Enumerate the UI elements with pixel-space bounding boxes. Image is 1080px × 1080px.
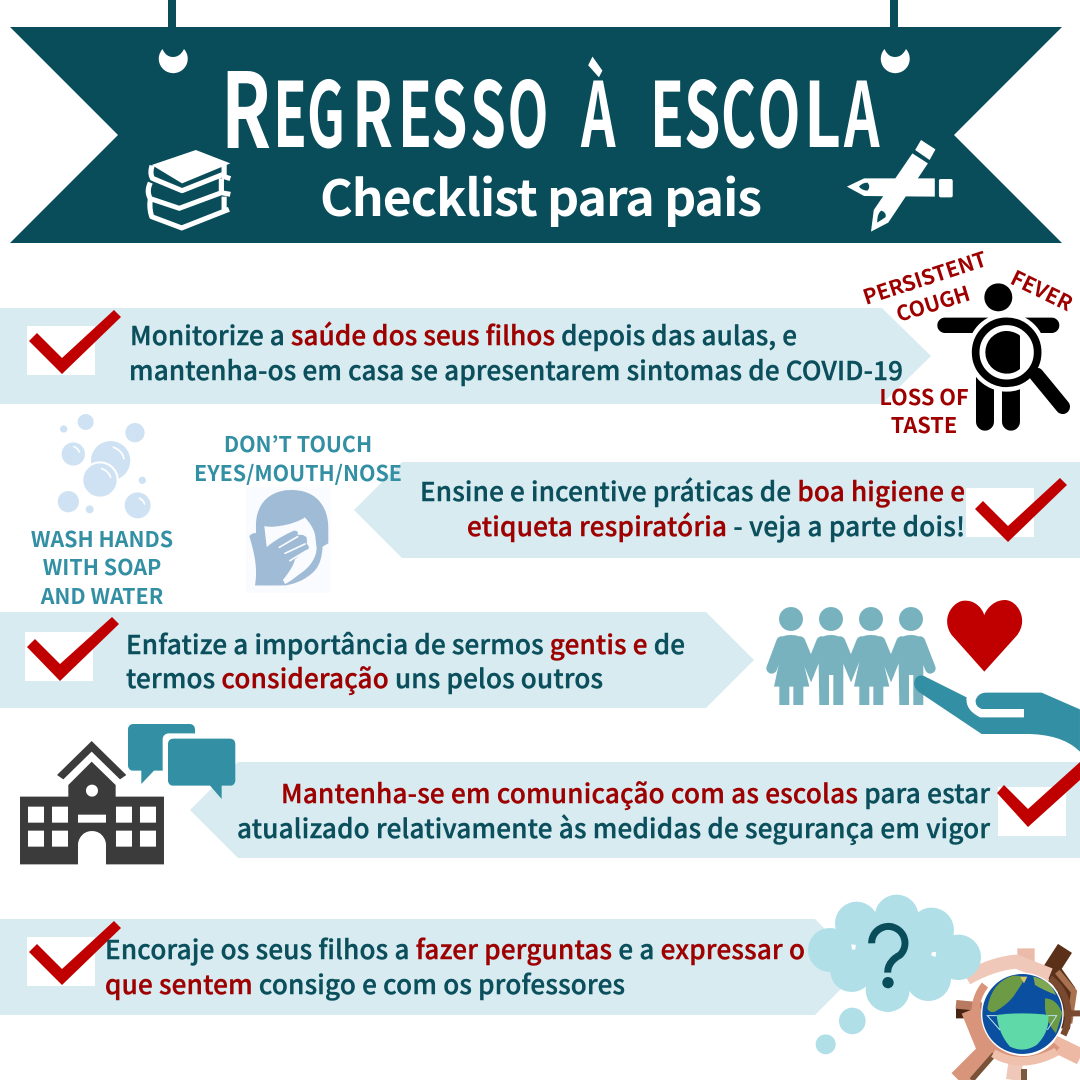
- label: wash hands: AND WATER: [40, 580, 164, 611]
- row 4: text: atualizado relativamente às medidas de segurança em vigor: [237, 809, 990, 846]
- row 1: text: mantenha-os em casa se apresentarem sintomas de COVID-19: [129, 351, 903, 388]
- row 1: text: [129, 316, 903, 388]
- row 3: text: Enfatize a importância de sermos gentis e de: [126, 625, 685, 662]
- row 4: text: Mantenha-se em comunicação com as escolas para estar: [281, 774, 990, 811]
- title: E: [398, 43, 432, 173]
- label: persistent cough: PERSISTENT: [859, 243, 990, 312]
- title: L: [804, 43, 841, 173]
- icon: four children: [772, 607, 930, 705]
- title: O: [508, 43, 548, 173]
- label: do not touch: EYES/MOUTH/NOSE: [194, 457, 402, 488]
- icon: speech bubbles: [128, 724, 235, 799]
- title: C: [721, 43, 756, 173]
- row 5: check: [27, 921, 121, 986]
- title: S: [470, 43, 506, 173]
- hanging banner: [10, 0, 1062, 243]
- label: do not touch: DON’T TOUCH: [224, 428, 372, 459]
- title: E: [650, 43, 684, 173]
- row 4: school communication band: [190, 762, 1080, 858]
- row 5: text: [105, 930, 805, 1002]
- title: S: [684, 43, 720, 173]
- row 3: text: [126, 625, 685, 696]
- row 4: check: [997, 762, 1080, 836]
- label: fever: FEVER: [1006, 262, 1078, 318]
- row 2: hygiene band: [354, 462, 1080, 558]
- title: E: [273, 43, 307, 173]
- row 3: check: [25, 617, 119, 681]
- row 2: text: Ensine e incentive práticas de boa higiene e: [420, 472, 965, 509]
- row 2: check: [966, 478, 1067, 542]
- icon: soap bubbles: [58, 414, 151, 518]
- icon: heart: [947, 600, 1022, 672]
- icon: person under magnifier: [945, 283, 1063, 431]
- label: wash hands: [31, 523, 173, 611]
- row 5: text: Encoraje os seus filhos a fazer perguntas e a expressar o: [105, 930, 805, 967]
- label: persistent cough: COUGH: [892, 278, 974, 329]
- row 3: kindness band: [0, 612, 754, 708]
- icon: face covering with hand: [246, 487, 331, 593]
- icon: thought cloud with question mark: [808, 895, 981, 1054]
- title: À: [580, 43, 616, 173]
- row 5: text: que sentem consigo e com os professores: [105, 965, 625, 1002]
- title: S: [431, 43, 468, 173]
- row 4: text: [237, 774, 990, 846]
- title: R: [221, 27, 271, 178]
- title: A: [843, 43, 880, 173]
- label: loss of taste: TASTE: [891, 409, 957, 440]
- row 2: text: etiqueta respiratória - veja a parte dois!: [467, 507, 965, 544]
- row 3: text: termos consideração uns pelos outros: [126, 659, 603, 696]
- icon: open hand: [914, 676, 1080, 752]
- row 2: text: [420, 472, 965, 544]
- icon: books: [148, 150, 230, 228]
- label: do not touch: [194, 428, 402, 488]
- label: loss of taste: [879, 381, 969, 440]
- label: wash hands: WITH SOAP: [43, 551, 161, 582]
- subtitle: Checklist para pais: [320, 159, 762, 231]
- title: [221, 27, 880, 178]
- label: loss of taste: LOSS OF: [879, 381, 969, 412]
- label: wash hands: WASH HANDS: [31, 523, 173, 554]
- row 1: text: Monitorize a saúde dos seus filhos depois das aulas, e: [130, 316, 797, 353]
- title: G: [307, 43, 345, 173]
- title: R: [352, 43, 393, 173]
- row 1: check: [27, 310, 121, 375]
- row 5: questions band: [0, 919, 863, 1015]
- image: globe with mask held by hands: [956, 948, 1080, 1080]
- title: O: [758, 43, 800, 173]
- icon: pen and pencil: [847, 140, 953, 232]
- row 1: health band: [0, 308, 931, 404]
- icon: school building: [20, 741, 164, 864]
